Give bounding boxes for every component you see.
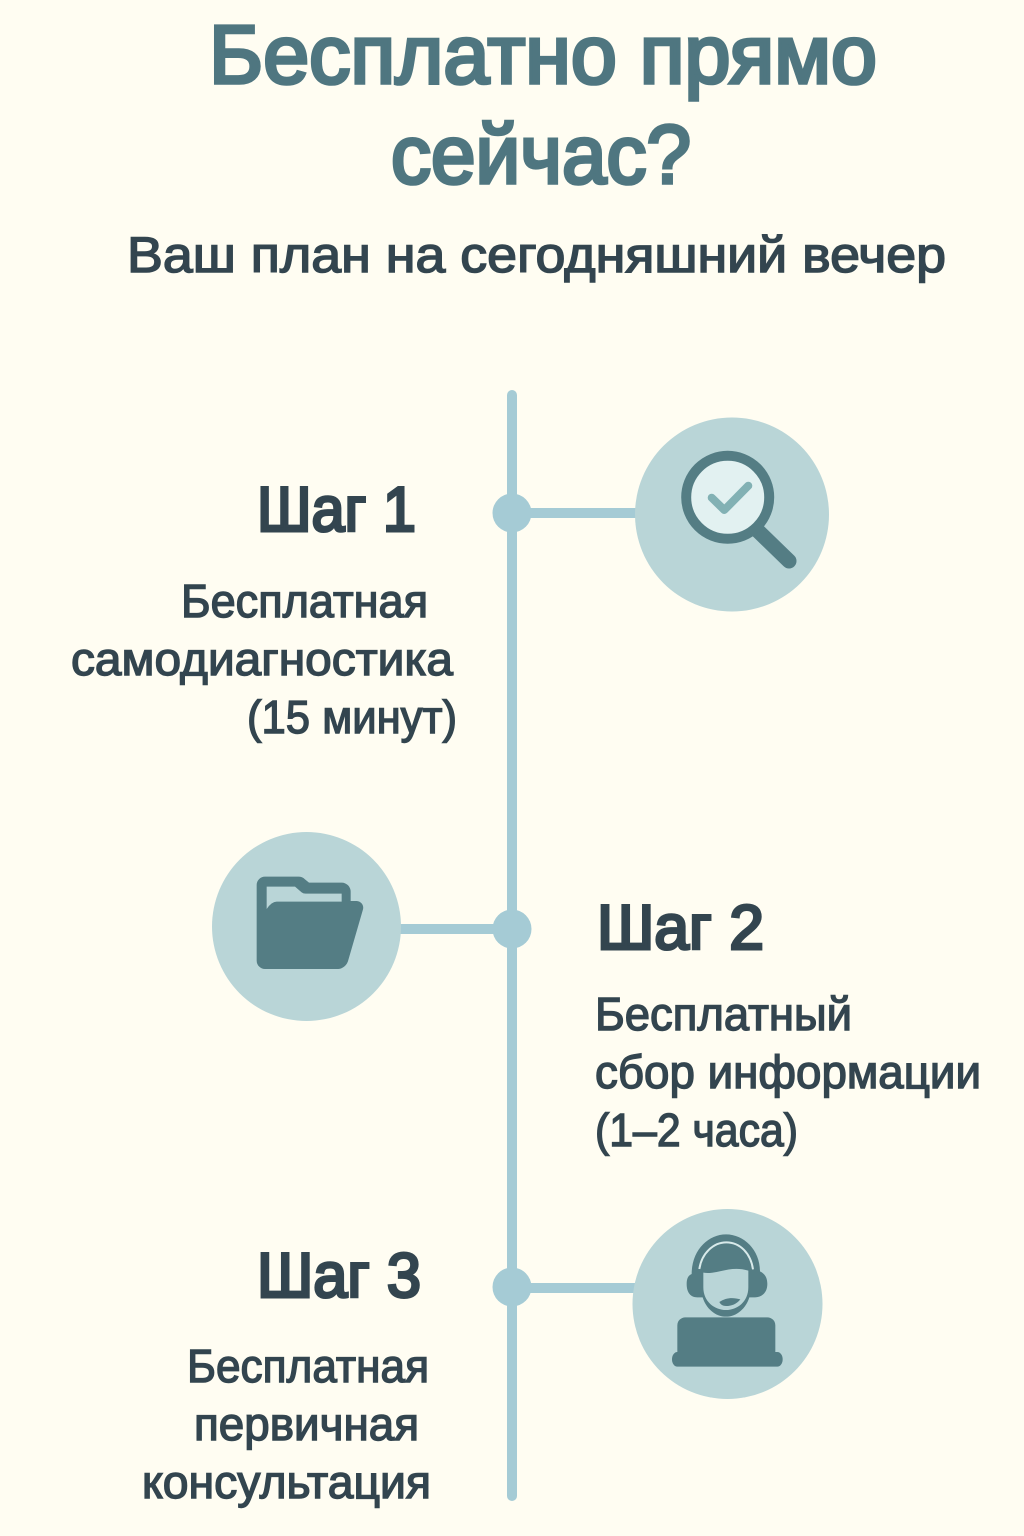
step 3 text bbox=[142, 1241, 431, 1508]
title bbox=[209, 8, 877, 201]
step 3 description: консультация bbox=[142, 1456, 431, 1508]
step 1 description bbox=[71, 575, 457, 743]
step 2 description bbox=[595, 988, 981, 1156]
step 2 text bbox=[595, 893, 981, 1156]
title: сейчас? bbox=[391, 108, 691, 201]
subtitle: Ваш план на сегодняшний вечер bbox=[127, 227, 946, 283]
title: Бесплатно прямо bbox=[209, 8, 877, 101]
step 1 connector and node bbox=[492, 494, 638, 532]
step 3 connector and node bbox=[492, 1268, 638, 1306]
icon: consultant with headset and laptop bbox=[632, 1209, 822, 1399]
step 1 description: Бесплатная bbox=[181, 575, 428, 627]
icon: magnifying glass with check bbox=[635, 418, 829, 612]
step 1 description: самодиагностика bbox=[71, 633, 453, 685]
step 2 description: Бесплатный bbox=[595, 988, 852, 1040]
step 3 description: первичная bbox=[194, 1398, 419, 1450]
step 3 heading: Шаг 3 bbox=[257, 1241, 421, 1311]
step 1 text bbox=[71, 475, 457, 743]
timeline vertical line bbox=[507, 390, 517, 1501]
step 1 description: (15 минут) bbox=[247, 691, 457, 743]
step 2 connector and node bbox=[398, 910, 532, 948]
step 2 description: (1–2 часа) bbox=[595, 1104, 798, 1156]
step 2 description: сбор информации bbox=[595, 1046, 981, 1098]
step 1 heading: Шаг 1 bbox=[257, 475, 416, 545]
step 3 description bbox=[142, 1340, 431, 1508]
icon: open folder bbox=[212, 832, 401, 1021]
step 3 description: Бесплатная bbox=[187, 1340, 429, 1392]
step 2 heading: Шаг 2 bbox=[597, 893, 764, 963]
